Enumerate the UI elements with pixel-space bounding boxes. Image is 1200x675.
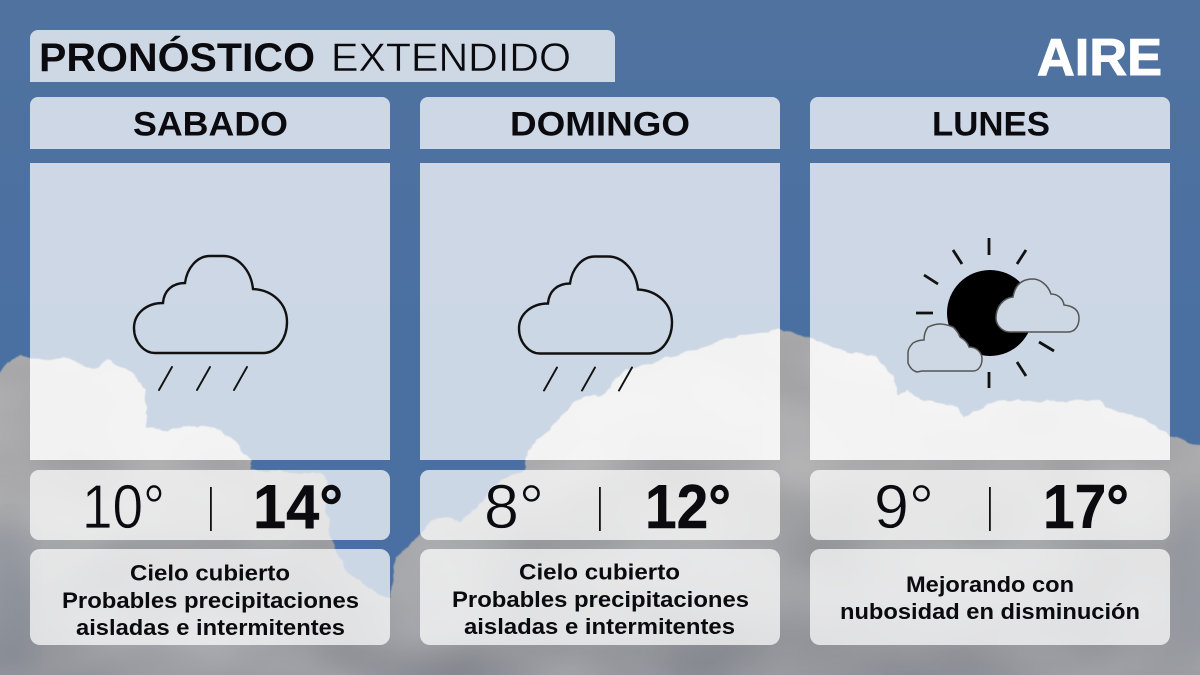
temperatures: sabado: 10° <box>82 473 165 542</box>
heading: sabado <box>30 97 390 149</box>
temperatures: lunes: 17° <box>1043 473 1129 542</box>
temperatures: domingo <box>420 470 780 542</box>
temperatures: sabado: 14° <box>253 473 343 542</box>
temperatures: lunes: 9° <box>874 473 934 542</box>
heading: sabado: SABADO <box>133 106 288 144</box>
panel: lunes <box>810 97 1170 645</box>
logo: AIRE: AIRE <box>1037 29 1162 87</box>
description: sabado: Cielo cubierto <box>130 560 290 586</box>
panel: domingo <box>420 97 780 645</box>
title: EXTENDIDO <box>331 36 571 80</box>
heading: domingo: DOMINGO <box>510 106 690 144</box>
icon: rain cloud sabado <box>134 256 287 390</box>
heading: lunes: LUNES <box>932 106 1050 144</box>
icon: sun with clouds lunes <box>908 238 1079 388</box>
panel: sabado <box>30 97 390 645</box>
weather image panel: domingo <box>420 163 780 460</box>
temperatures: domingo: 12° <box>645 473 731 542</box>
temperatures: sabado <box>30 470 390 542</box>
temperatures: domingo: 8° <box>484 473 544 542</box>
description: domingo: aisladas e intermitentes <box>464 614 735 639</box>
description: lunes <box>810 549 1170 645</box>
weather image panel: sabado <box>30 163 390 460</box>
description: sabado: Probables precipitaciones <box>62 588 359 613</box>
heading: lunes <box>810 97 1170 149</box>
icon: rain cloud domingo <box>519 256 672 390</box>
description: sabado <box>30 549 390 645</box>
title: PRONÓSTICO <box>39 34 315 80</box>
description: lunes: Mejorando con <box>906 572 1074 597</box>
panel: title bar <box>30 30 615 82</box>
description: domingo: Probables precipitaciones <box>452 587 749 612</box>
cloud highlight seen through image panels <box>30 328 1170 460</box>
description: sabado: aisladas e intermitentes <box>76 615 345 640</box>
description: domingo <box>420 549 780 645</box>
description: lunes: nubosidad en disminución <box>840 599 1140 624</box>
temperatures: lunes <box>810 470 1170 542</box>
weather image panel: lunes <box>810 163 1170 460</box>
heading: domingo <box>420 97 780 149</box>
description: domingo: Cielo cubierto <box>519 560 680 584</box>
